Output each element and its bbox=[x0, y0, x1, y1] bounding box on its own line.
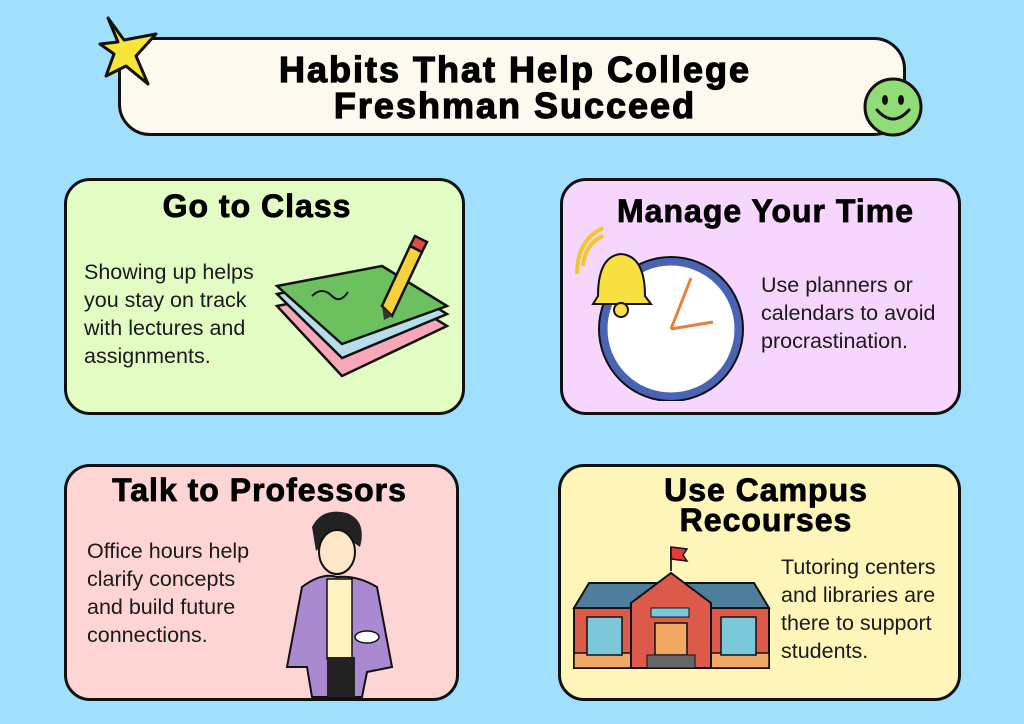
heading bbox=[664, 472, 868, 538]
text block: and build future bbox=[87, 595, 235, 619]
text block: students. bbox=[781, 639, 868, 663]
heading: Talk to Professors bbox=[112, 472, 407, 508]
icon: notepad and pencil bbox=[274, 234, 450, 378]
icon: clock with bell bbox=[575, 226, 744, 401]
heading: Go to Class bbox=[163, 188, 351, 224]
title text bbox=[279, 49, 751, 126]
text block: there to support bbox=[781, 611, 932, 635]
heading: Recourses bbox=[680, 502, 852, 538]
icon: school building bbox=[572, 546, 771, 669]
icon: professor bbox=[286, 512, 394, 698]
text block: with lectures and bbox=[84, 316, 245, 340]
icon: smiley bbox=[864, 78, 922, 136]
text block: Office hours help bbox=[87, 539, 249, 563]
text block bbox=[84, 260, 254, 368]
panel: go to class bbox=[64, 178, 465, 415]
text block: Use planners or bbox=[761, 273, 913, 297]
text block: clarify concepts bbox=[87, 567, 235, 591]
text block bbox=[781, 555, 936, 663]
text block: connections. bbox=[87, 623, 208, 647]
text block bbox=[761, 273, 936, 353]
title banner bbox=[118, 37, 906, 136]
title text: Freshman Succeed bbox=[334, 85, 696, 126]
heading: Use Campus bbox=[664, 472, 868, 508]
text block: assignments. bbox=[84, 344, 211, 368]
title text: Habits That Help College bbox=[279, 49, 751, 90]
text block: you stay on track bbox=[84, 288, 247, 312]
text block: and libraries are bbox=[781, 583, 935, 607]
text block: procrastination. bbox=[761, 329, 908, 353]
text block bbox=[87, 539, 249, 647]
panel: use campus resources bbox=[558, 464, 961, 701]
text block: calendars to avoid bbox=[761, 301, 936, 325]
icon: star bbox=[98, 16, 158, 86]
text block: Tutoring centers bbox=[781, 555, 936, 579]
text block: Showing up helps bbox=[84, 260, 254, 284]
heading: Manage Your Time bbox=[617, 193, 914, 229]
panel: manage your time bbox=[560, 178, 961, 415]
panel: talk to professors bbox=[64, 464, 459, 701]
